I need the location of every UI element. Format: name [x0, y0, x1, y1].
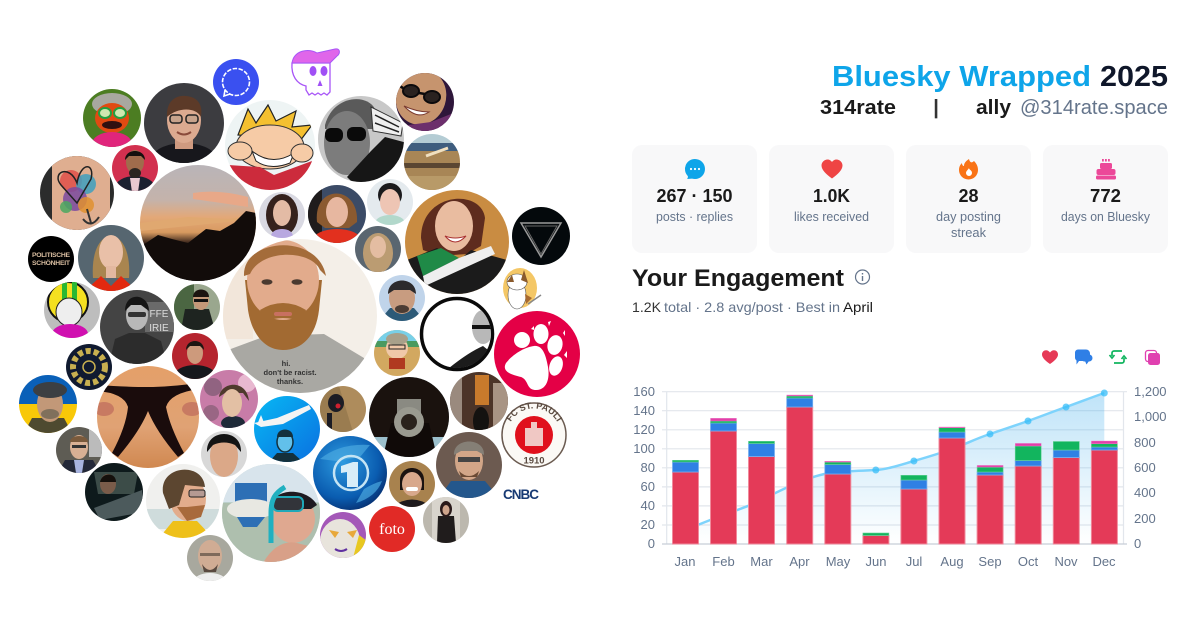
avatar: bearded man in grey shirt: hi. [282, 359, 290, 368]
logo: CNBC: CNBC [503, 487, 539, 502]
avatar: bearded man in grey shirt: thanks. [277, 377, 303, 386]
icon: heart [822, 160, 842, 178]
stat card: posts and replies [632, 145, 757, 253]
right axis labels: 200 [1134, 511, 1156, 526]
avatar bubble cluster [19, 48, 580, 581]
subtitle: handles: 314rate [820, 97, 896, 119]
avatar: man in suit on red [112, 145, 158, 191]
stacked bars: replies [672, 398, 1117, 489]
right axis labels: 400 [1134, 485, 1156, 500]
stat card: posts and replies: posts · replies [656, 209, 733, 224]
avatar: foto logo on red: foto [379, 521, 405, 538]
left axis labels: 20 [641, 517, 655, 532]
month labels: Nov [1054, 554, 1078, 569]
avatar: FC St. Pauli crest: 1910 [523, 456, 545, 466]
avatar: black and white man with glasses [100, 290, 175, 364]
stat card: days on Bluesky [1043, 145, 1168, 253]
avatar: black and white man with sunglasses [318, 96, 407, 185]
legend: quotes squares [1146, 350, 1160, 365]
avatar: dark-haired man [201, 431, 247, 477]
avatar: bearded man in grey shirt [223, 239, 377, 393]
legend icons [1042, 350, 1160, 365]
cumulative line [685, 393, 1104, 530]
avatar: purple skull with cap [292, 49, 339, 95]
month labels: Dec [1092, 554, 1116, 569]
engagement summary line: total · 2.8 avg/post · Best in [664, 299, 840, 315]
stacked bars: likes [672, 407, 1117, 544]
stat card: likes [769, 145, 894, 253]
left axis labels: 80 [641, 460, 655, 475]
stat card: days on Bluesky: 772 [1090, 186, 1121, 206]
avatar: laughing woman on wood floor [405, 190, 509, 298]
right axis labels [1134, 384, 1167, 551]
avatar: dark portrait with amber light [450, 372, 509, 435]
icon: chat bubble [685, 159, 705, 179]
left axis labels: 100 [633, 441, 655, 456]
right axis labels: 1,000 [1134, 409, 1167, 424]
avatar: man with glasses on dark brick [144, 83, 224, 163]
engagement summary line: 1.2K [632, 299, 662, 315]
avatar: smiling woman with hands on cheeks [389, 461, 435, 507]
month labels: Oct [1018, 554, 1038, 569]
avatar: vintage folding camera [369, 377, 449, 457]
avatar: painted face [320, 512, 367, 563]
avatar: red-haired woman in red top [308, 185, 366, 243]
combo chart: monthly engagement [633, 384, 1167, 569]
month labels: Jul [906, 554, 922, 569]
heading: Your Engagement: Your Engagement [632, 265, 844, 292]
left axis labels: 0 [648, 536, 655, 551]
avatar: man in blue t-shirt with glasses [436, 432, 502, 498]
avatar: blonde woman [355, 226, 401, 273]
avatar: bald man [187, 535, 233, 581]
left axis labels: 160 [633, 384, 655, 399]
avatar: man on Ukrainian flag [19, 375, 77, 433]
avatar: FC St. Pauli crest [501, 402, 567, 468]
avatar: pixel-art helmet character [44, 282, 100, 344]
avatar: smiling man with black glasses [396, 73, 454, 131]
stacked bars: quotes [710, 395, 1117, 467]
right axis labels: 800 [1134, 435, 1156, 450]
avatar: man with beard in blue [379, 275, 425, 321]
month labels: Aug [940, 554, 964, 569]
month labels: Feb [712, 554, 735, 569]
avatar: cartoon dog on orange splash [503, 268, 541, 309]
stat card: likes: likes received [794, 209, 869, 224]
avatar: black ring with bald man [422, 298, 494, 374]
left axis labels: 120 [633, 422, 655, 437]
title: Bluesky Wrapped 2025: Bluesky Wrapped [832, 61, 1091, 93]
subtitle: handles: @314rate.space [1020, 97, 1168, 119]
subtitle: handles: ally [976, 97, 1012, 119]
stat card: days on Bluesky: days on Bluesky [1061, 209, 1150, 224]
right axis labels: 600 [1134, 460, 1156, 475]
icon: birthday cake [1096, 159, 1116, 180]
month labels: Mar [750, 554, 773, 569]
title: Bluesky Wrapped 2025: 2025 [1100, 61, 1168, 93]
stat card: streak: day posting [936, 209, 1001, 224]
stat card: streak [906, 145, 1031, 253]
stat card: streak: 28 [958, 186, 978, 206]
avatar: Calvin cartoon [225, 100, 315, 191]
avatar: sunset over trees [140, 165, 256, 281]
avatar: Politische Schoenheit: SCHÖNHEIT [32, 258, 71, 267]
chart gridlines and axes [662, 392, 1127, 544]
legend: replies bubbles [1075, 350, 1092, 364]
avatar: man on red wall [172, 333, 218, 379]
avatar: woman snorkeling with boat [222, 464, 320, 563]
avatar: South Park style character [374, 330, 420, 376]
avatar: woman with dark bun [367, 179, 413, 225]
legend: likes heart [1042, 350, 1058, 364]
cumulative area [685, 393, 1104, 544]
avatar: red muppet [83, 89, 141, 147]
left axis labels [633, 384, 655, 551]
avatar: man among pink blossoms [200, 370, 258, 430]
right axis labels: 0 [1134, 536, 1141, 551]
avatar: dark-haired woman [259, 192, 305, 243]
right axis labels: 1,200 [1134, 384, 1167, 399]
avatar: bearded man in grey shirt: don't be racist. [263, 368, 317, 377]
month labels: May [826, 554, 851, 569]
avatar: Politische Schoenheit: POLITISCHE [32, 252, 70, 259]
icon: flame [959, 159, 978, 180]
avatar: black and white man with glasses: FFE [150, 309, 169, 320]
avatar: man in suit with glasses [56, 427, 102, 473]
avatar: man in black t-shirt outdoors [174, 284, 220, 330]
avatar: woman in leather jacket mirror selfie [423, 497, 469, 543]
left axis labels: 40 [641, 498, 655, 513]
engagement summary line: April [843, 299, 873, 315]
icon: info [856, 270, 870, 284]
avatar: black and white man with glasses: IRIE [149, 323, 169, 334]
avatar: man in car [85, 463, 144, 521]
avatar: yellow lettering on navy [66, 344, 112, 390]
month labels: Apr [789, 554, 810, 569]
left axis labels: 60 [641, 479, 655, 494]
avatar: Signal logo [213, 59, 259, 105]
stacked bars: reposts [672, 396, 1117, 536]
month labels: Jun [866, 554, 886, 569]
avatar: Tagesschau globe [313, 436, 387, 510]
stat card: posts and replies: 267 · 150 [656, 186, 732, 206]
avatar: triangle logo [512, 207, 570, 265]
avatar: FC St. Pauli crest: FC ST. PAULI [506, 402, 562, 422]
month labels: Sep [978, 554, 1002, 569]
month labels [675, 554, 1116, 569]
subtitle: handles [820, 97, 1168, 119]
avatar: coastal landscape [404, 134, 460, 192]
stat card: likes: 1.0K [813, 186, 850, 206]
avatar: close-up with black glasses [94, 366, 202, 468]
avatar: plane illustration on blue [254, 396, 320, 462]
avatar: blonde woman in red [78, 225, 144, 291]
avatar: curly-haired man in profile [146, 464, 220, 538]
legend: reposts arrows [1110, 351, 1126, 363]
left axis labels: 140 [633, 403, 655, 418]
avatar: plush mascot on coat [320, 386, 366, 432]
avatar: watercolor tattoo [40, 156, 114, 230]
avatar: Politische Schoenheit [28, 236, 74, 282]
stat card: streak: streak [951, 225, 986, 240]
avatar: red paw logo [494, 311, 580, 397]
month labels: Jan [675, 554, 695, 569]
avatar: foto logo on red [369, 506, 415, 552]
subtitle: handles: | [933, 97, 939, 119]
cumulative points [872, 390, 1108, 474]
